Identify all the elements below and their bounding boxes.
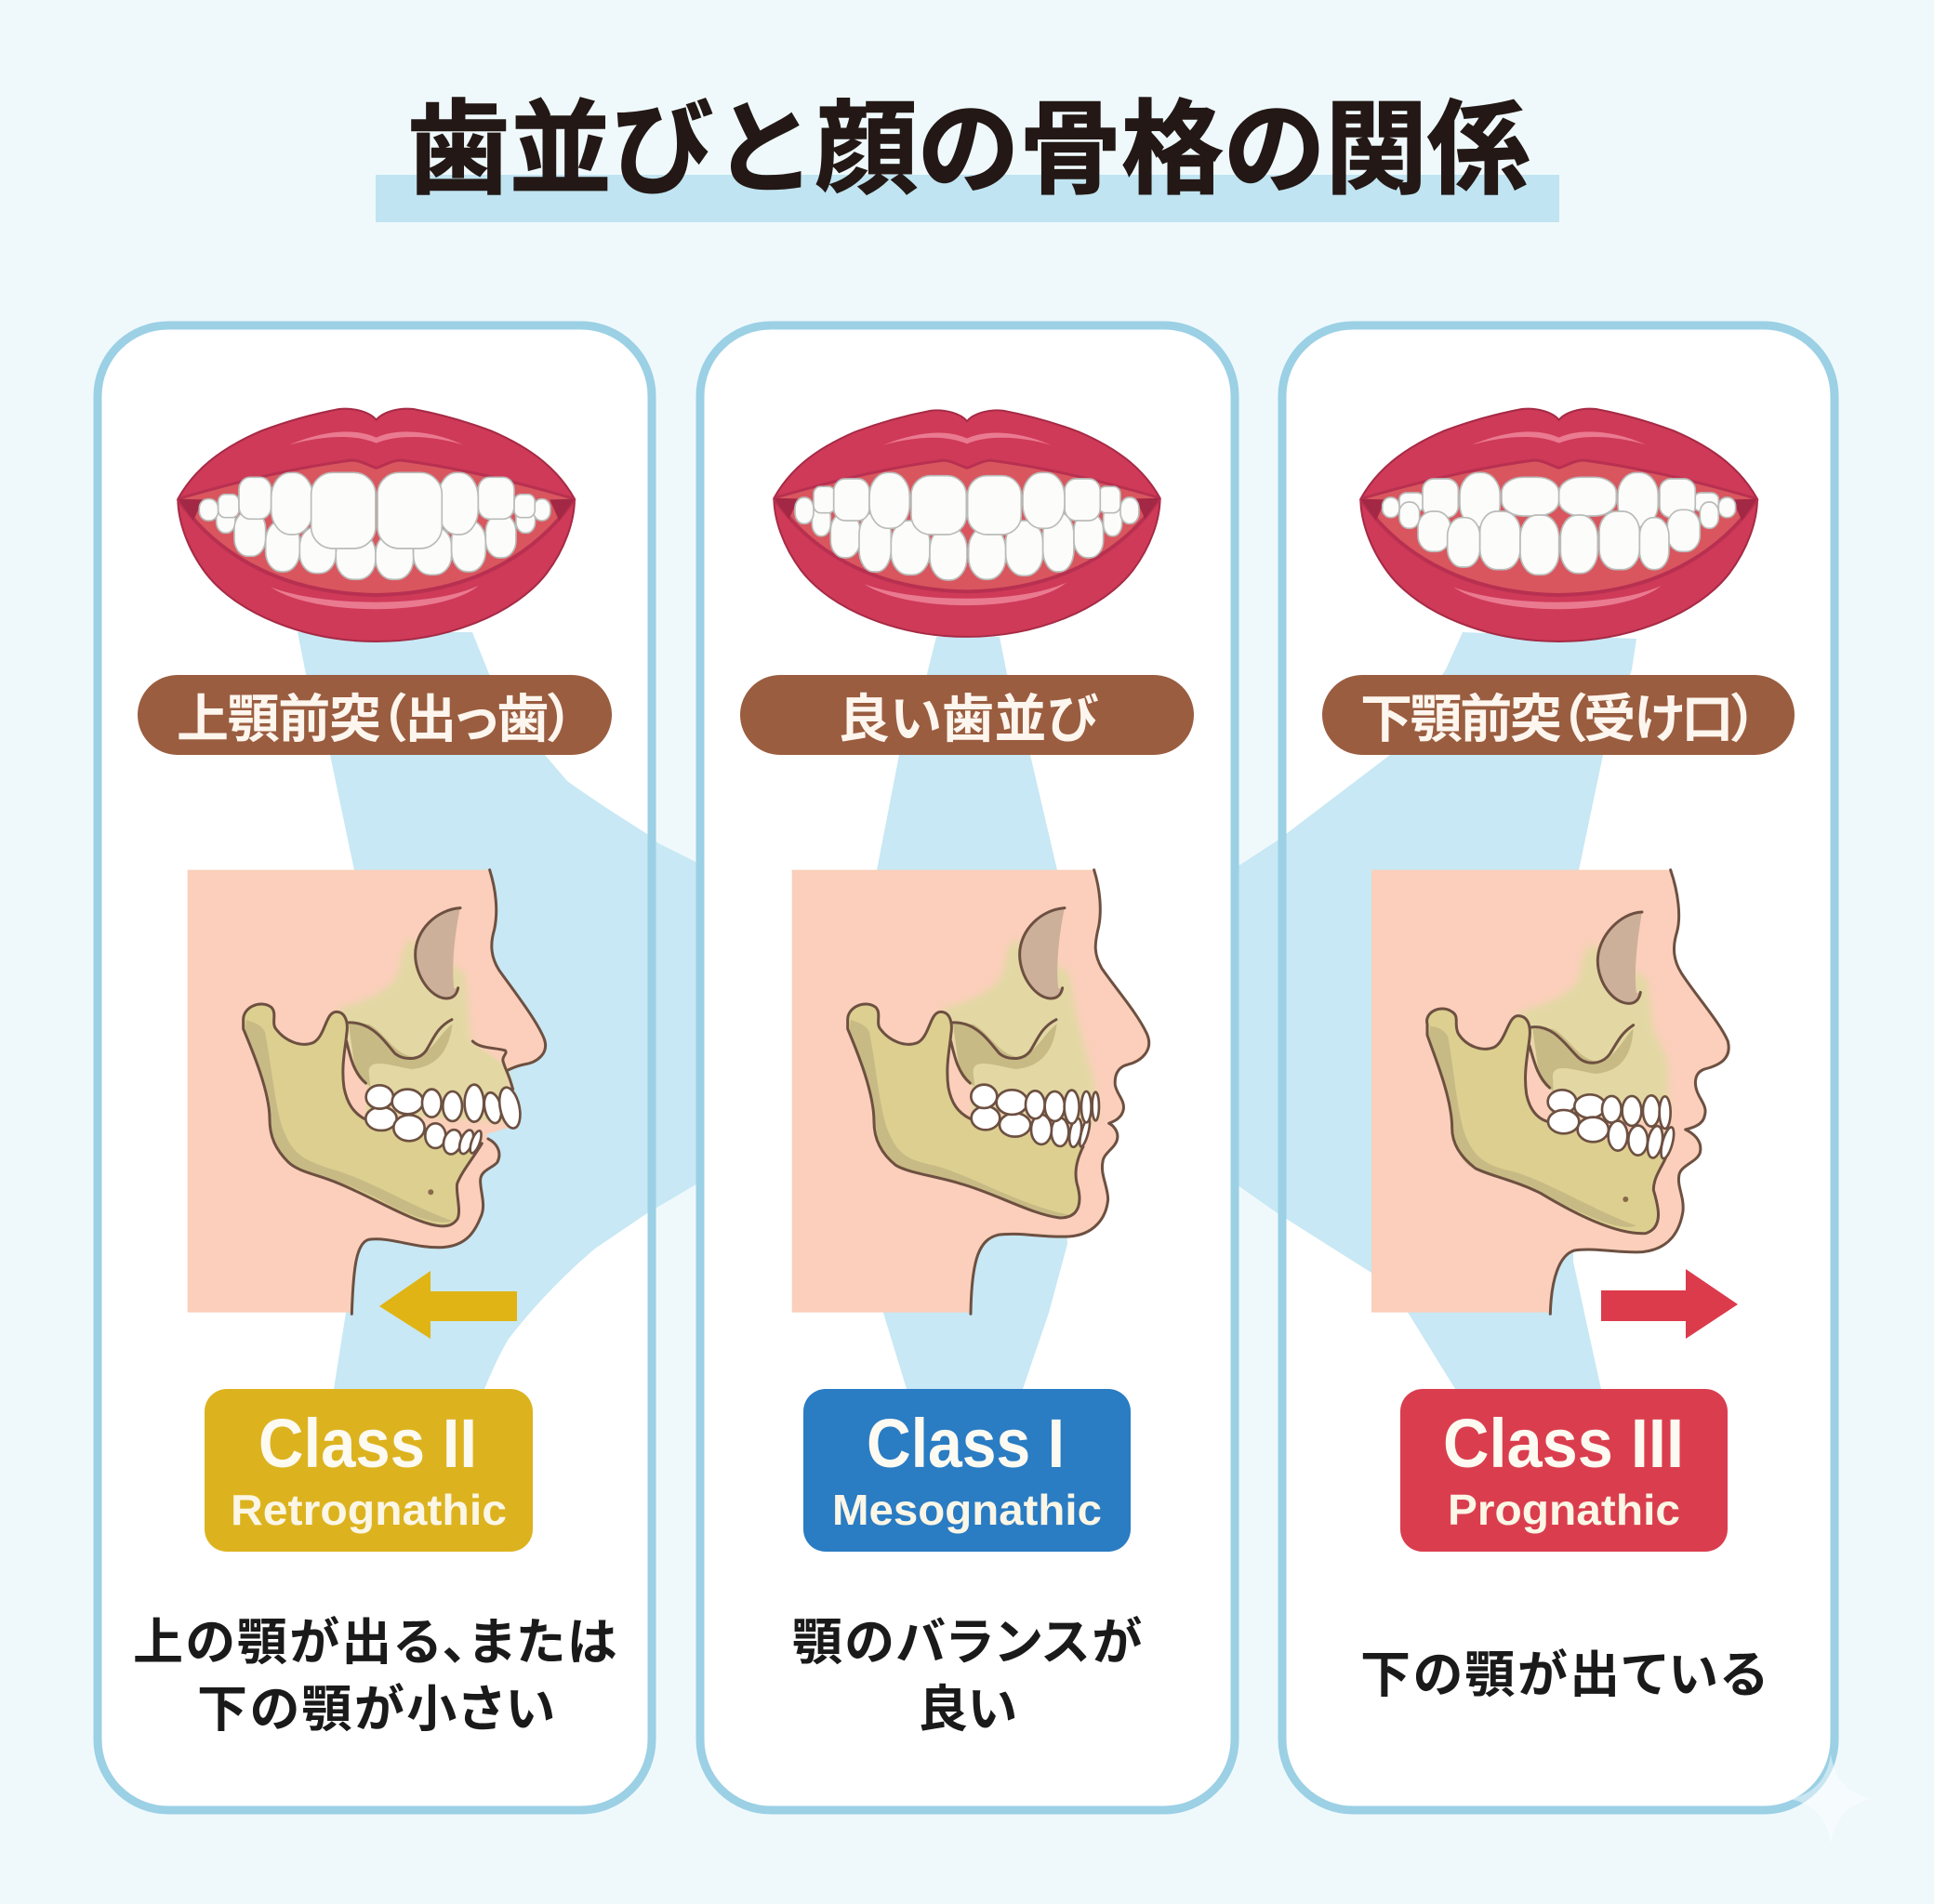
description text: 下の顎が出ている [1360,1647,1767,1703]
light blue connecting bands [298,632,1636,1389]
label: 下顎前突: 下顎前突（受け口） [1360,690,1757,748]
panel: class II [98,325,652,1810]
illustration: class III profile [1371,870,1729,1314]
arrow: left, yellow [379,1271,517,1339]
badge: Class I Mesognathic: Mesognathic [832,1486,1102,1534]
badge: Class II Retrognathic: Retrognathic [231,1486,507,1534]
badge: Class II Retrognathic: Class II [258,1405,477,1482]
label: 上顎前突: 上顎前突（出っ歯） [177,690,574,748]
panel: class III [1282,325,1835,1810]
card outline [98,325,652,1810]
label: 良い歯並び: 良い歯並び [838,690,1099,748]
description text: 顎のバランスが [792,1615,1142,1671]
description text [792,1615,1142,1738]
badge: Class III Prognathic: Prognathic [1448,1486,1680,1534]
label: 上顎前突 [138,675,612,755]
illustration: underbite teeth [1360,409,1757,641]
badge: Class I Mesognathic: Class I [867,1405,1065,1482]
illustration: class I profile [792,870,1149,1314]
badge: Class III Prognathic [1400,1389,1728,1552]
panel: class I [700,325,1235,1810]
badge: Class III Prognathic: Class III [1443,1405,1684,1482]
illustration: good teeth alignment [774,410,1160,637]
card backgrounds [98,325,1835,1810]
title highlight band [376,175,1559,222]
description text: 良い [918,1682,1017,1738]
badge: Class II Retrognathic [205,1389,533,1552]
description text: 上の顎が出る、または [133,1615,616,1671]
card outline [700,325,1235,1810]
title [376,93,1559,222]
label: 下顎前突 [1322,675,1795,755]
illustration: protruding upper teeth [178,409,575,641]
description text: 下の顎が小さい [197,1682,555,1738]
illustration: class II profile [188,870,546,1314]
badge: Class I Mesognathic [803,1389,1131,1552]
arrow: right, red [1601,1269,1738,1339]
card outline [1282,325,1835,1810]
sparkle mark [1789,1754,1873,1844]
label: 良い歯並び [740,675,1194,755]
title text: 歯並びと顔の骨格の関係 [407,93,1530,207]
description text [133,1615,616,1738]
